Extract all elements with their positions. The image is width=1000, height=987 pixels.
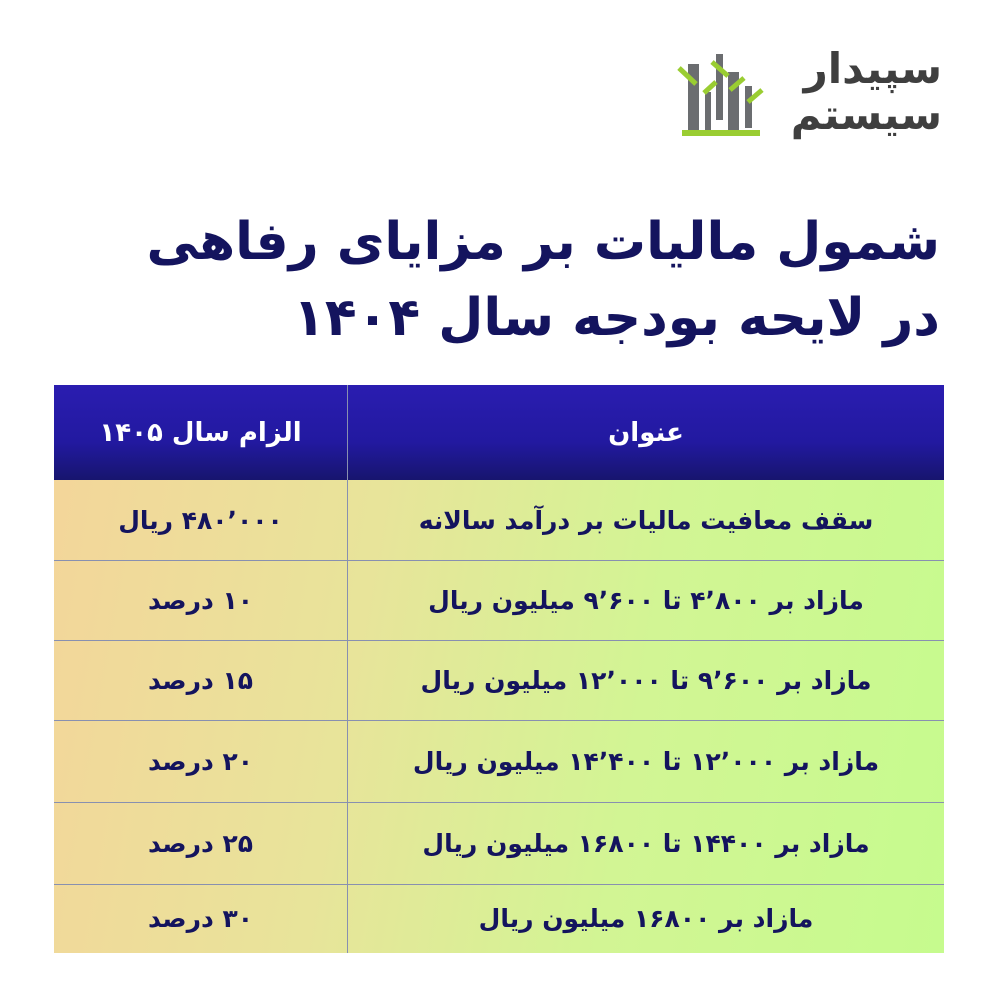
row 3: ۱۵ درصد: [148, 666, 253, 694]
row 2: مازاد بر ۴٬۸۰۰ تا ۹٬۶۰۰ میلیون ریال: [428, 586, 864, 614]
logo text: سیستم: [791, 90, 942, 139]
row 4: [148, 746, 879, 776]
title: شمول مالیات بر مزایای رفاهی: [146, 212, 940, 272]
row 1: سقف معافیت مالیات بر درآمد سالانه: [419, 506, 873, 534]
logo text: [791, 44, 942, 140]
icon: bars logo: [677, 54, 764, 136]
row 1: ۴۸۰٬۰۰۰ ریال: [118, 506, 283, 534]
row 4: ۲۰ درصد: [148, 746, 253, 776]
title: [146, 212, 940, 348]
row 6: [148, 904, 813, 934]
header: 1405 column: الزام سال ۱۴۰۵: [99, 418, 302, 448]
row 2: ۱۰ درصد: [148, 586, 253, 614]
row 2: [148, 586, 864, 616]
logo text: سپیدار: [804, 44, 942, 93]
table header: [54, 385, 944, 480]
row 5: ۲۵ درصد: [148, 828, 253, 858]
header: title column: عنوان: [608, 418, 684, 448]
row 4: مازاد بر ۱۲٬۰۰۰ تا ۱۴٬۴۰۰ میلیون ریال: [413, 746, 879, 776]
logo: [677, 44, 942, 140]
row 3: مازاد بر ۹٬۶۰۰ تا ۱۲٬۰۰۰ میلیون ریال: [421, 666, 871, 694]
table: [54, 385, 944, 953]
title: در لایحه بودجه سال ۱۴۰۴: [293, 288, 940, 348]
row 6: مازاد بر ۱۶۸۰۰ میلیون ریال: [479, 904, 813, 933]
row 5: [148, 828, 870, 858]
row 6: ۳۰ درصد: [148, 904, 253, 933]
row 5: مازاد بر ۱۴۴۰۰ تا ۱۶۸۰۰ میلیون ریال: [422, 828, 870, 858]
row 3: [148, 666, 871, 696]
row 1: [118, 505, 873, 536]
